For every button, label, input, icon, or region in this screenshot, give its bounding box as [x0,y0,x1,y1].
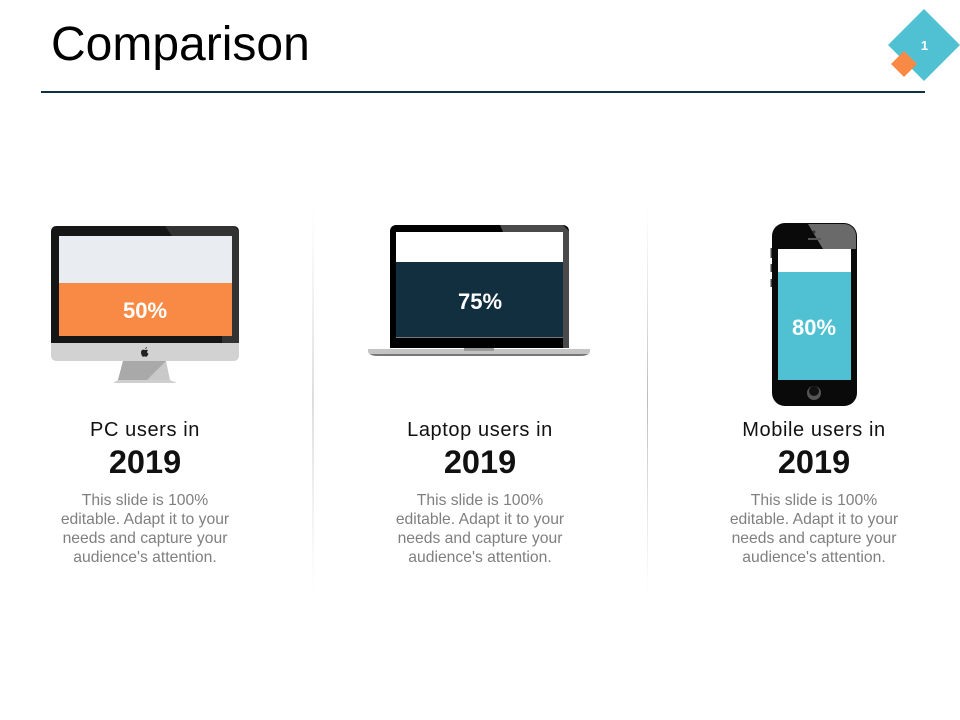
year: Laptop: 2019 [444,444,516,480]
icon: laptop with 75% fill: 75% [458,289,502,314]
panel: Mobile users [730,419,898,566]
text block: Mobile: editable. Adapt it to your [730,511,898,528]
title rule [41,91,925,93]
heading: Laptop users: Laptop users in [407,419,553,441]
icon: smartphone with 80% fill: 80% [792,315,836,340]
text block: Mobile: needs and capture your [732,530,896,547]
text block: PC: audience's attention. [73,549,217,566]
title: Comparison [51,18,310,71]
panel: Laptop users [396,419,564,566]
text block: Laptop: needs and capture your [398,530,562,547]
text block: Laptop [396,492,564,566]
heading: PC users: PC users in [90,419,200,441]
heading: Mobile users: Mobile users in [742,419,886,441]
icon: page badge: 1 [921,38,928,53]
text block: PC [61,492,229,566]
text block: Mobile: audience's attention. [742,549,886,566]
text block: Mobile: This slide is 100% [751,492,877,509]
column dividers [312,235,648,566]
icon: page badge [888,9,960,81]
text block: Laptop: audience's attention. [408,549,552,566]
year: Mobile: 2019 [778,444,850,480]
year: PC: 2019 [109,444,181,480]
text block: Mobile [730,492,898,566]
icon: desktop monitor with 50% fill: 50% [123,298,167,323]
text block: Laptop: This slide is 100% [417,492,543,509]
panel: PC users [61,419,229,566]
text block: PC: editable. Adapt it to your [61,511,229,528]
text block: PC: This slide is 100% [82,492,208,509]
text block: PC: needs and capture your [63,530,227,547]
text block: Laptop: editable. Adapt it to your [396,511,564,528]
